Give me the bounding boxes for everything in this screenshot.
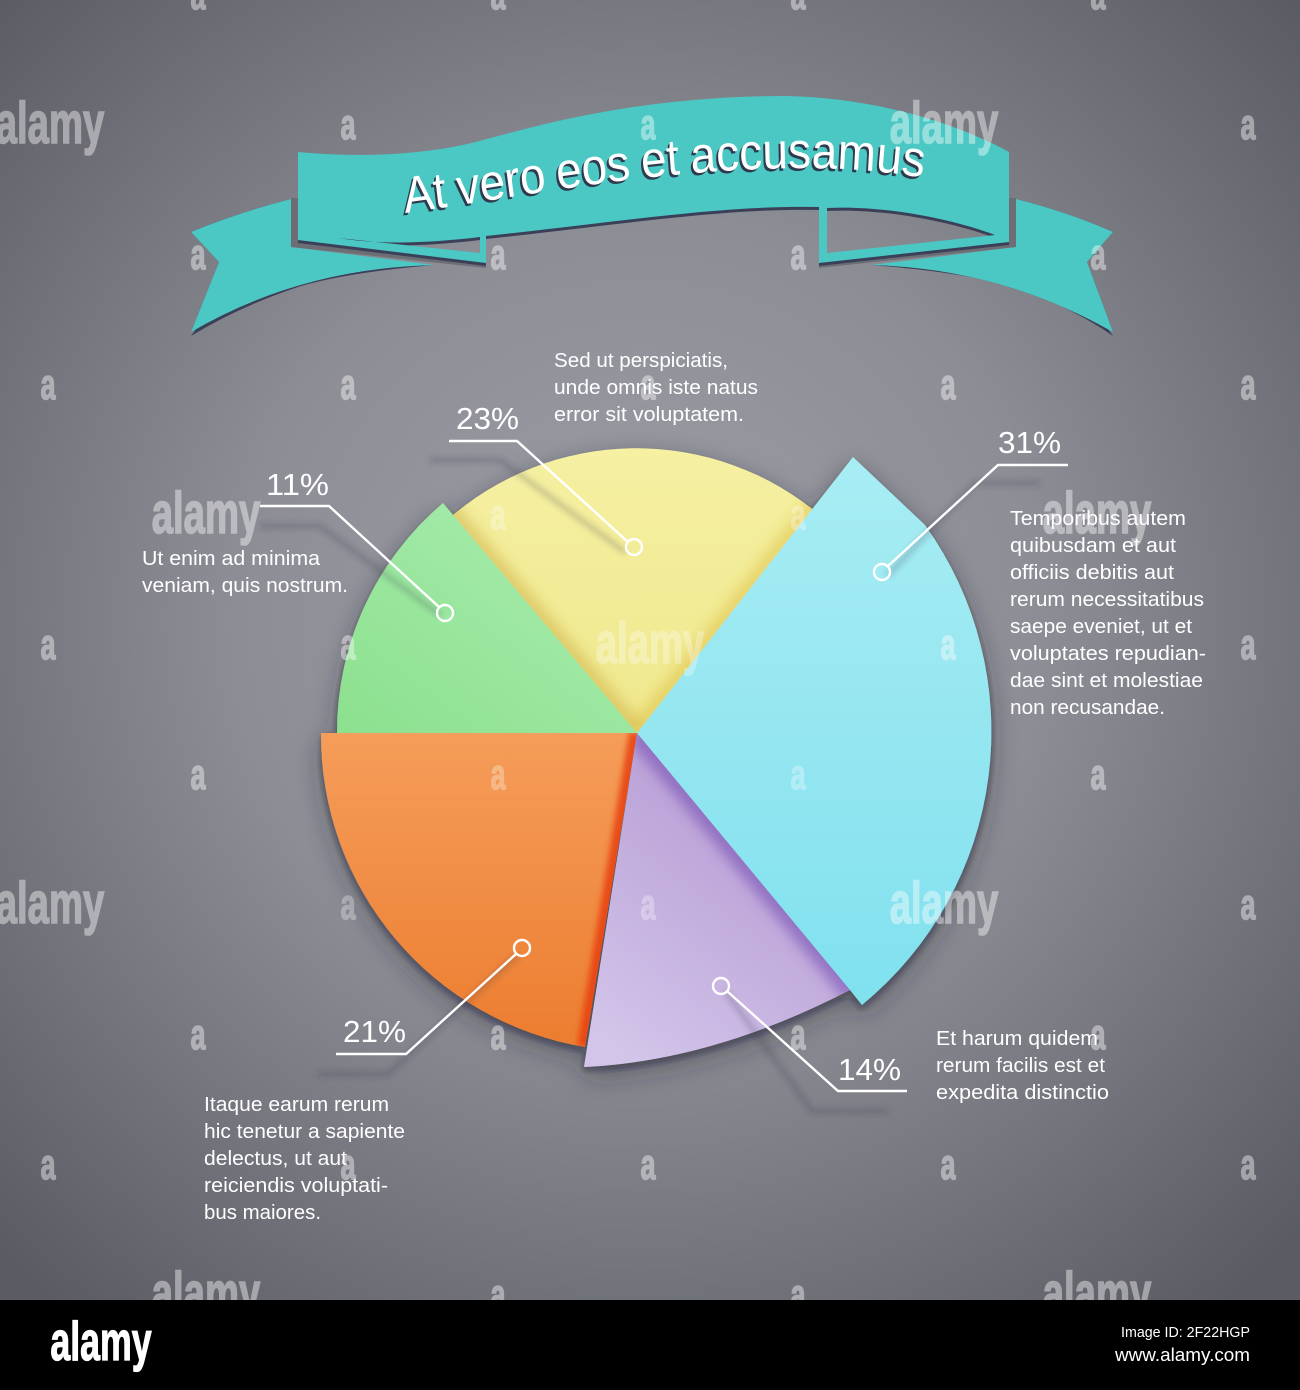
watermark pattern: a	[1241, 361, 1256, 409]
text block: 31%: quibusdam et aut	[1010, 535, 1176, 557]
watermark pattern: alamy	[596, 612, 705, 676]
text block: 31%	[1010, 508, 1206, 719]
text block: 11%: Ut enim ad minima	[142, 548, 321, 570]
text block: 14%: expedita distinctio	[936, 1082, 1109, 1104]
watermark pattern: a	[341, 361, 356, 409]
watermark pattern: a	[941, 361, 956, 409]
text block: 21%: hic tenetur a sapiente	[204, 1121, 405, 1143]
callout: 21%	[336, 940, 530, 1054]
text block: 21%: delectus, ut aut	[204, 1148, 347, 1170]
ribbon left tail	[191, 199, 435, 336]
callout: 31%: 31%	[998, 425, 1061, 460]
pie chart	[321, 448, 991, 1067]
ribbon band shadow	[291, 198, 1016, 268]
text block: 31%: saepe eveniet, ut et	[1010, 616, 1192, 638]
ribbon dark edge	[298, 99, 1009, 266]
watermark pattern: alamy	[1043, 1262, 1152, 1326]
text block: 23%	[554, 350, 758, 426]
text block: 14%: rerum facilis est et	[936, 1055, 1105, 1077]
watermark pattern: a	[1091, 751, 1106, 799]
ribbon title: At vero eos et accusamus	[405, 140, 924, 213]
text block: 21%: bus maiores.	[204, 1202, 321, 1224]
watermark pattern: a	[491, 1011, 506, 1059]
ribbon banner	[191, 96, 1113, 336]
slice: orange 21%	[321, 733, 637, 1047]
callout: 23%: 23%	[456, 401, 519, 436]
watermark pattern: a	[941, 621, 956, 669]
watermark pattern: a	[791, 1011, 806, 1059]
footer url: www.alamy.com	[1114, 1345, 1250, 1365]
leader line shadows	[260, 460, 1040, 1111]
callout: 14%: 14%	[838, 1052, 901, 1087]
watermark pattern: a	[791, 1271, 806, 1319]
watermark pattern: a	[341, 621, 356, 669]
watermark pattern: a	[341, 1141, 356, 1189]
footer logo: alamy	[50, 1310, 152, 1372]
text block: 11%	[142, 548, 348, 597]
watermark pattern: a	[641, 361, 656, 409]
text block: 31%: Temporibus autem	[1010, 508, 1186, 530]
text block: 31%: officiis debitis aut	[1010, 562, 1174, 584]
ribbon title: At vero eos et accusamus	[403, 144, 922, 216]
watermark pattern: a	[641, 881, 656, 929]
watermark pattern: a	[1091, 1011, 1106, 1059]
text block: 21%	[204, 1094, 405, 1224]
ribbon right tail	[871, 199, 1113, 336]
watermark pattern: a	[41, 621, 56, 669]
watermark pattern: a	[191, 751, 206, 799]
watermark pattern: alamy	[152, 482, 261, 546]
slice: green 11%	[337, 503, 637, 733]
slice: yellow 23%	[443, 448, 853, 733]
watermark pattern: alamy	[152, 1262, 261, 1326]
watermark pattern: a	[791, 491, 806, 539]
text block: 23%: Sed ut perspiciatis,	[554, 350, 728, 372]
watermark pattern: a	[1241, 881, 1256, 929]
watermark pattern: a	[491, 491, 506, 539]
watermark pattern: a	[1241, 101, 1256, 149]
text block: 11%: veniam, quis nostrum.	[142, 575, 348, 597]
watermark pattern: a	[491, 1271, 506, 1319]
text block: 23%: error sit voluptatem.	[554, 404, 744, 426]
callout: 11%: 11%	[266, 467, 329, 502]
watermark pattern: a	[41, 1141, 56, 1189]
slice: purple 14%	[584, 733, 855, 1067]
watermark pattern: a	[791, 231, 806, 279]
text block: 31%: rerum necessitatibus	[1010, 589, 1204, 611]
watermark pattern: a	[641, 1141, 656, 1189]
watermark pattern: a	[341, 101, 356, 149]
callout: 14%	[713, 978, 907, 1091]
callout: 11%	[260, 467, 453, 621]
callout: 21%: 21%	[343, 1014, 406, 1049]
text block: 21%: Itaque earum rerum	[204, 1094, 389, 1116]
text block: 21%: reiciendis voluptati-	[204, 1175, 388, 1197]
watermark pattern: alamy	[1043, 482, 1152, 546]
watermark pattern: a	[1241, 1141, 1256, 1189]
watermark pattern: a	[41, 361, 56, 409]
watermark pattern: a	[1241, 621, 1256, 669]
watermark pattern: a	[941, 1141, 956, 1189]
watermark pattern: alamy	[890, 92, 999, 156]
slice: blue 31%	[637, 457, 991, 1005]
callout: 31%	[874, 425, 1068, 580]
watermark pattern: a	[191, 1011, 206, 1059]
callout: 23%	[449, 401, 642, 555]
ribbon main band	[298, 96, 1009, 263]
watermark pattern: a	[1091, 231, 1106, 279]
watermark pattern: a	[341, 881, 356, 929]
footer bar	[0, 1300, 1300, 1390]
watermark pattern: alamy	[890, 872, 999, 936]
text block: 31%: voluptates repudian-	[1010, 643, 1206, 665]
text block: 14%: Et harum quidem	[936, 1028, 1098, 1050]
text block: 31%: non recusandae.	[1010, 697, 1165, 719]
text block: 31%: dae sint et molestiae	[1010, 670, 1203, 692]
watermark pattern: a	[641, 101, 656, 149]
watermark pattern: a	[791, 751, 806, 799]
footer image id: Image ID: 2F22HGP	[1121, 1324, 1250, 1341]
watermark pattern: a	[491, 751, 506, 799]
watermark pattern: a	[191, 231, 206, 279]
watermark pattern: a	[491, 231, 506, 279]
text block: 14%	[936, 1028, 1109, 1104]
text block: 23%: unde omnis iste natus	[554, 377, 758, 399]
